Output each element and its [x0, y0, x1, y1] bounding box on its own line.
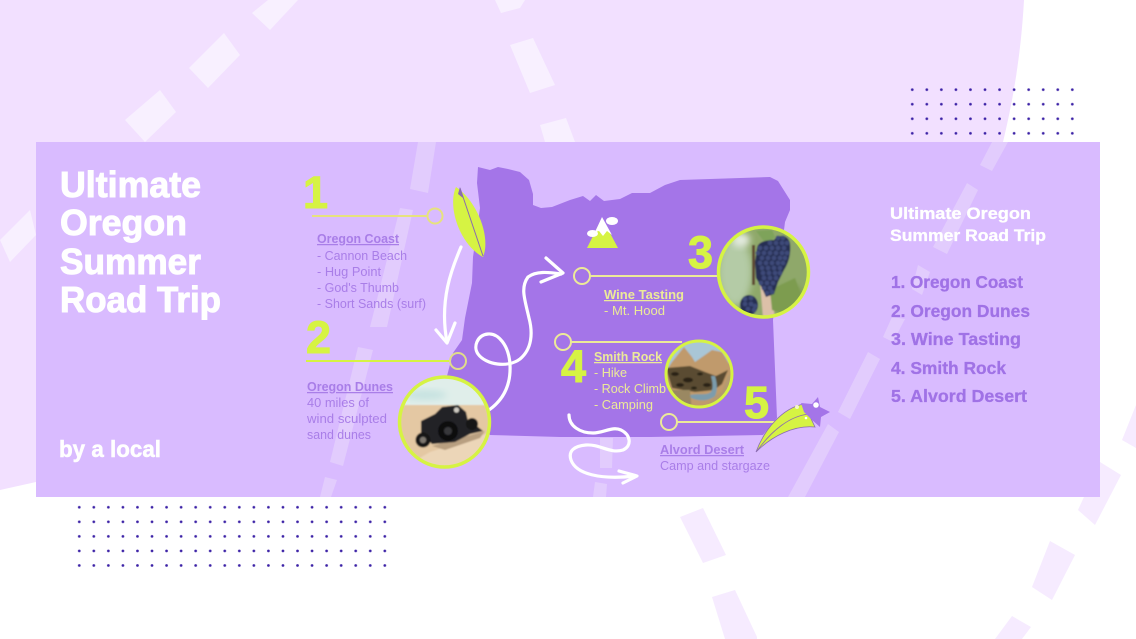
sidebar stop list [891, 272, 1030, 406]
text: Wine Tasting: Wine Tasting [604, 288, 684, 302]
road dashes in panel [320, 142, 1008, 497]
text: Oregon Coast: Oregon Coast [317, 232, 400, 246]
number 5 with marker line: 5 [744, 377, 769, 428]
text: Oregon Coast: - Hug Point [317, 265, 382, 279]
title: Ultimate [60, 164, 201, 205]
number 1 with marker line: 1 [303, 167, 328, 218]
text: Alvord Desert [660, 443, 770, 473]
arrow: coast to dunes [436, 247, 461, 343]
dot grid top right [905, 82, 1080, 141]
arrow: squiggle to desert [569, 415, 637, 483]
photo: grapes [715, 223, 813, 321]
text: Oregon Dunes: wind sculpted [306, 412, 387, 426]
title [60, 164, 221, 320]
number 4 with marker line [555, 334, 682, 392]
text: Oregon Dunes [306, 380, 393, 442]
sidebar heading [890, 205, 1046, 245]
icon: shooting star [756, 397, 830, 452]
dot grid bottom left [72, 500, 392, 573]
number 5 with marker line [661, 377, 775, 430]
sidebar stop list: 3. Wine Tasting [891, 329, 1021, 349]
map of Oregon [447, 167, 790, 437]
text: Oregon Dunes: Oregon Dunes [307, 380, 393, 394]
photo: dune buggy [396, 374, 494, 472]
background blob [0, 0, 1024, 490]
text: Smith Rock: - Hike [594, 366, 627, 380]
sidebar stop list: 5. Alvord Desert [891, 386, 1027, 406]
number 3 with marker line: 3 [688, 227, 713, 278]
text: Smith Rock: Smith Rock [594, 350, 662, 364]
text: Smith Rock: - Camping [594, 398, 653, 412]
text: Wine Tasting: - Mt. Hood [604, 304, 665, 318]
number 4 with marker line: 4 [561, 341, 586, 392]
text: Oregon Dunes: 40 miles of [307, 396, 370, 410]
sidebar stop list: 1. Oregon Coast [891, 272, 1023, 292]
text: Smith Rock: - Rock Climb [594, 382, 666, 396]
text: Oregon Dunes: sand dunes [307, 428, 371, 442]
title: Oregon [60, 202, 187, 243]
number 2 with marker line [306, 312, 466, 369]
text: Smith Rock [594, 350, 666, 412]
photo: Smith Rock [664, 340, 734, 408]
icon: surfboard [453, 187, 485, 257]
text: Alvord Desert: Camp and stargaze [660, 459, 770, 473]
title: Summer [60, 241, 201, 282]
text: Wine Tasting [604, 288, 684, 318]
title: Road Trip [60, 279, 221, 320]
text: Oregon Coast: - Cannon Beach [317, 249, 407, 263]
sidebar heading: Ultimate Oregon [890, 205, 1031, 223]
sidebar stop list: 4. Smith Rock [891, 358, 1006, 378]
byline: by a local [59, 436, 161, 462]
sidebar stop list: 2. Oregon Dunes [891, 301, 1030, 321]
number 3 with marker line [574, 227, 717, 284]
text: Oregon Coast [317, 232, 426, 311]
text: Alvord Desert: Alvord Desert [660, 443, 745, 457]
arrow: dunes loop to wine [476, 258, 563, 410]
icon: mountain [587, 217, 618, 248]
sidebar heading: Summer Road Trip [890, 227, 1046, 245]
main panel [36, 142, 1100, 497]
text: Oregon Coast: - Short Sands (surf) [317, 297, 426, 311]
number 2 with marker line: 2 [306, 312, 331, 363]
number 1 with marker line [303, 167, 442, 224]
text: Oregon Coast: - God's Thumb [317, 281, 399, 295]
